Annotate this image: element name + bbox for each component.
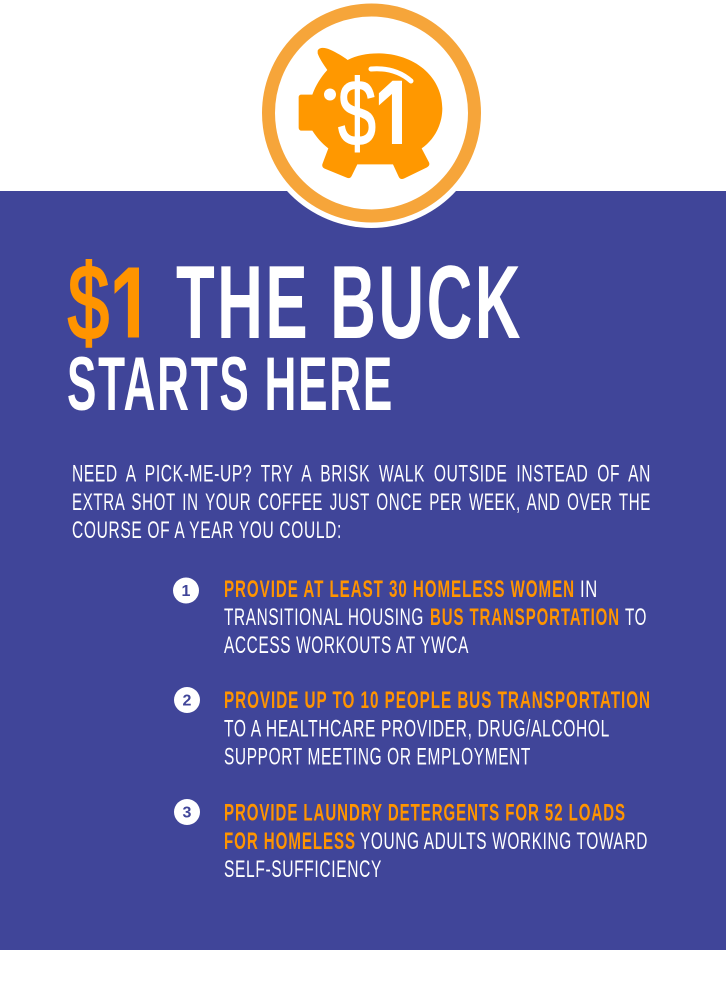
icon: piggy bank badge <box>256 0 486 228</box>
panel: blue background <box>0 191 726 950</box>
title: $ <box>68 244 109 362</box>
number badge 2: 2 <box>183 692 192 710</box>
list item 3: FOR HOMELESS <box>224 828 356 855</box>
icon: piggy bank badge: 1 <box>374 57 418 182</box>
number badge 3 <box>174 799 200 825</box>
list item 1: TO <box>625 604 647 631</box>
number badge 3: 3 <box>183 804 192 822</box>
number badge 2 <box>174 687 200 713</box>
list item 2: SUPPORT MEETING OR EMPLOYMENT <box>224 744 531 770</box>
title: STARTS HERE <box>67 342 394 427</box>
intro text <box>72 460 651 544</box>
title: 1 <box>109 242 154 376</box>
list item 1: ACCESS WORKOUTS AT YWCA <box>224 632 469 659</box>
title <box>68 259 520 410</box>
number badge 1 <box>173 578 199 604</box>
list item 1: TRANSITIONAL HOUSING <box>224 604 424 631</box>
list item 1: BUS TRANSPORTATION <box>430 604 620 631</box>
list item 3 <box>174 799 648 883</box>
icon: piggy bank badge: $ <box>338 60 376 165</box>
list item 3: SELF-SUFFICIENCY <box>224 856 382 883</box>
number badge 1: 1 <box>182 583 191 600</box>
list item 1 <box>173 576 647 659</box>
list item 1: IN <box>580 576 598 603</box>
intro text: COURSE OF A YEAR YOU COULD: <box>72 517 342 544</box>
list item 2 <box>174 687 651 770</box>
